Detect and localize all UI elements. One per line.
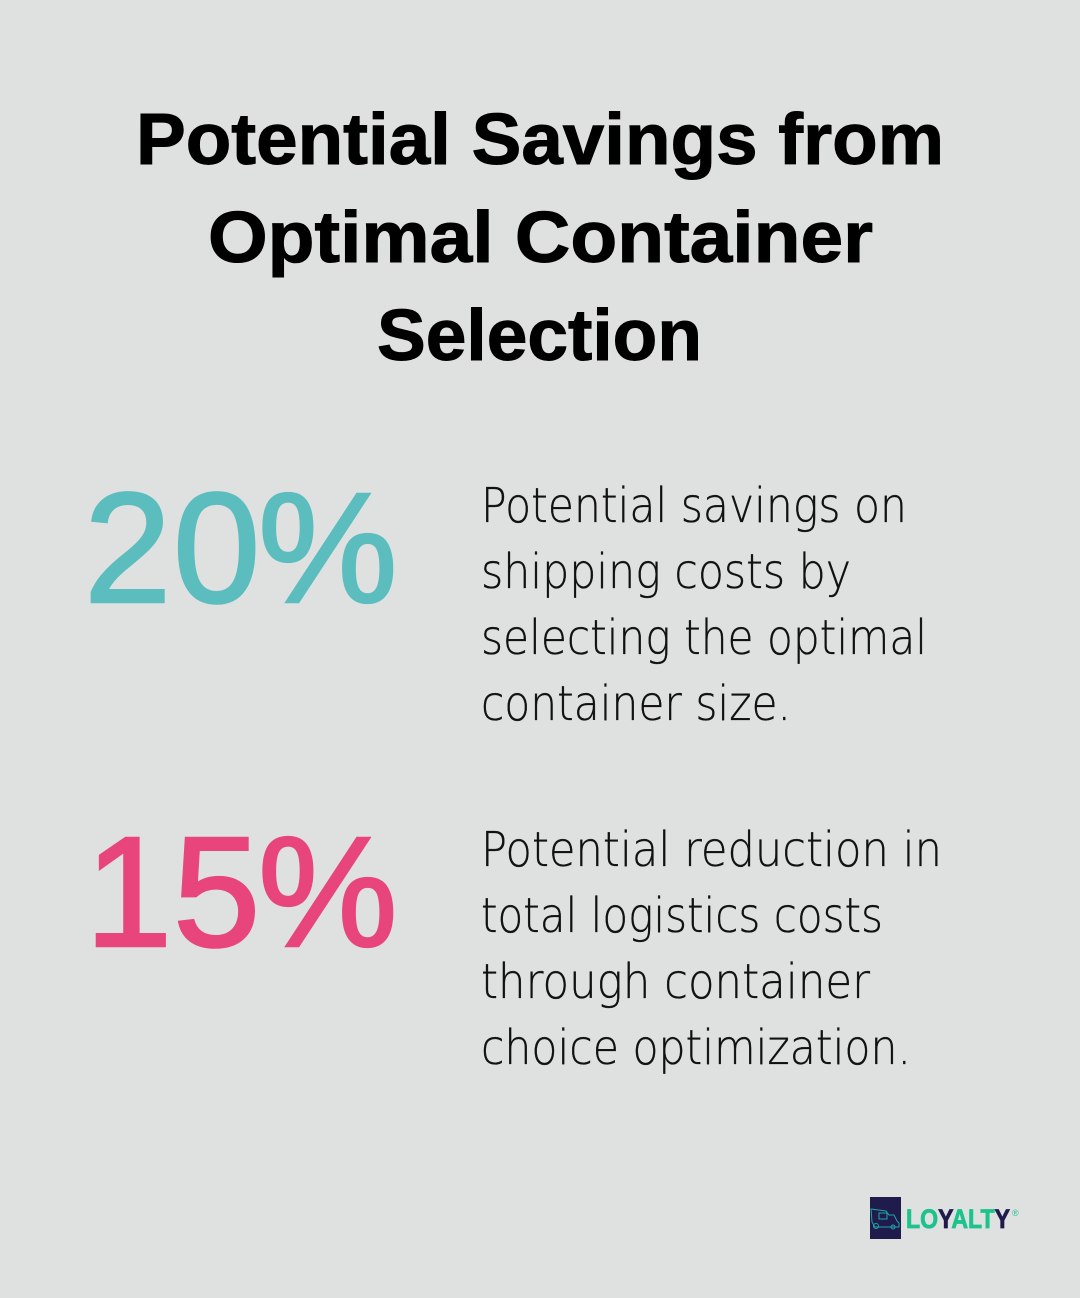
stat: 15%: 15% [85, 805, 398, 980]
title: Selection [377, 296, 702, 376]
text block: 20% description: shipping costs by [481, 544, 851, 600]
text block: 15% description: through container [481, 954, 870, 1010]
text block: 15% description: choice optimization. [481, 1020, 911, 1076]
stat: 20%: 20% [84, 461, 398, 636]
text block: 15% description [481, 822, 942, 1076]
icon: truck badge [870, 1197, 901, 1239]
text block: 20% description: Potential savings on [481, 478, 907, 534]
title [136, 100, 944, 376]
text block: 20% description: selecting the optimal [481, 610, 927, 666]
wordmark: LOYALTY [906, 1204, 1010, 1234]
text block: 15% description: Potential reduction in [481, 822, 942, 878]
title: Optimal Container [208, 198, 873, 278]
text block: 20% description [481, 478, 927, 732]
text block: 15% description: total logistics costs [481, 888, 883, 944]
title: Potential Savings from [136, 100, 944, 180]
logo: Loyalty [870, 1197, 1019, 1239]
registered mark: ® [1012, 1208, 1019, 1218]
text block: 20% description: container size. [481, 676, 791, 732]
